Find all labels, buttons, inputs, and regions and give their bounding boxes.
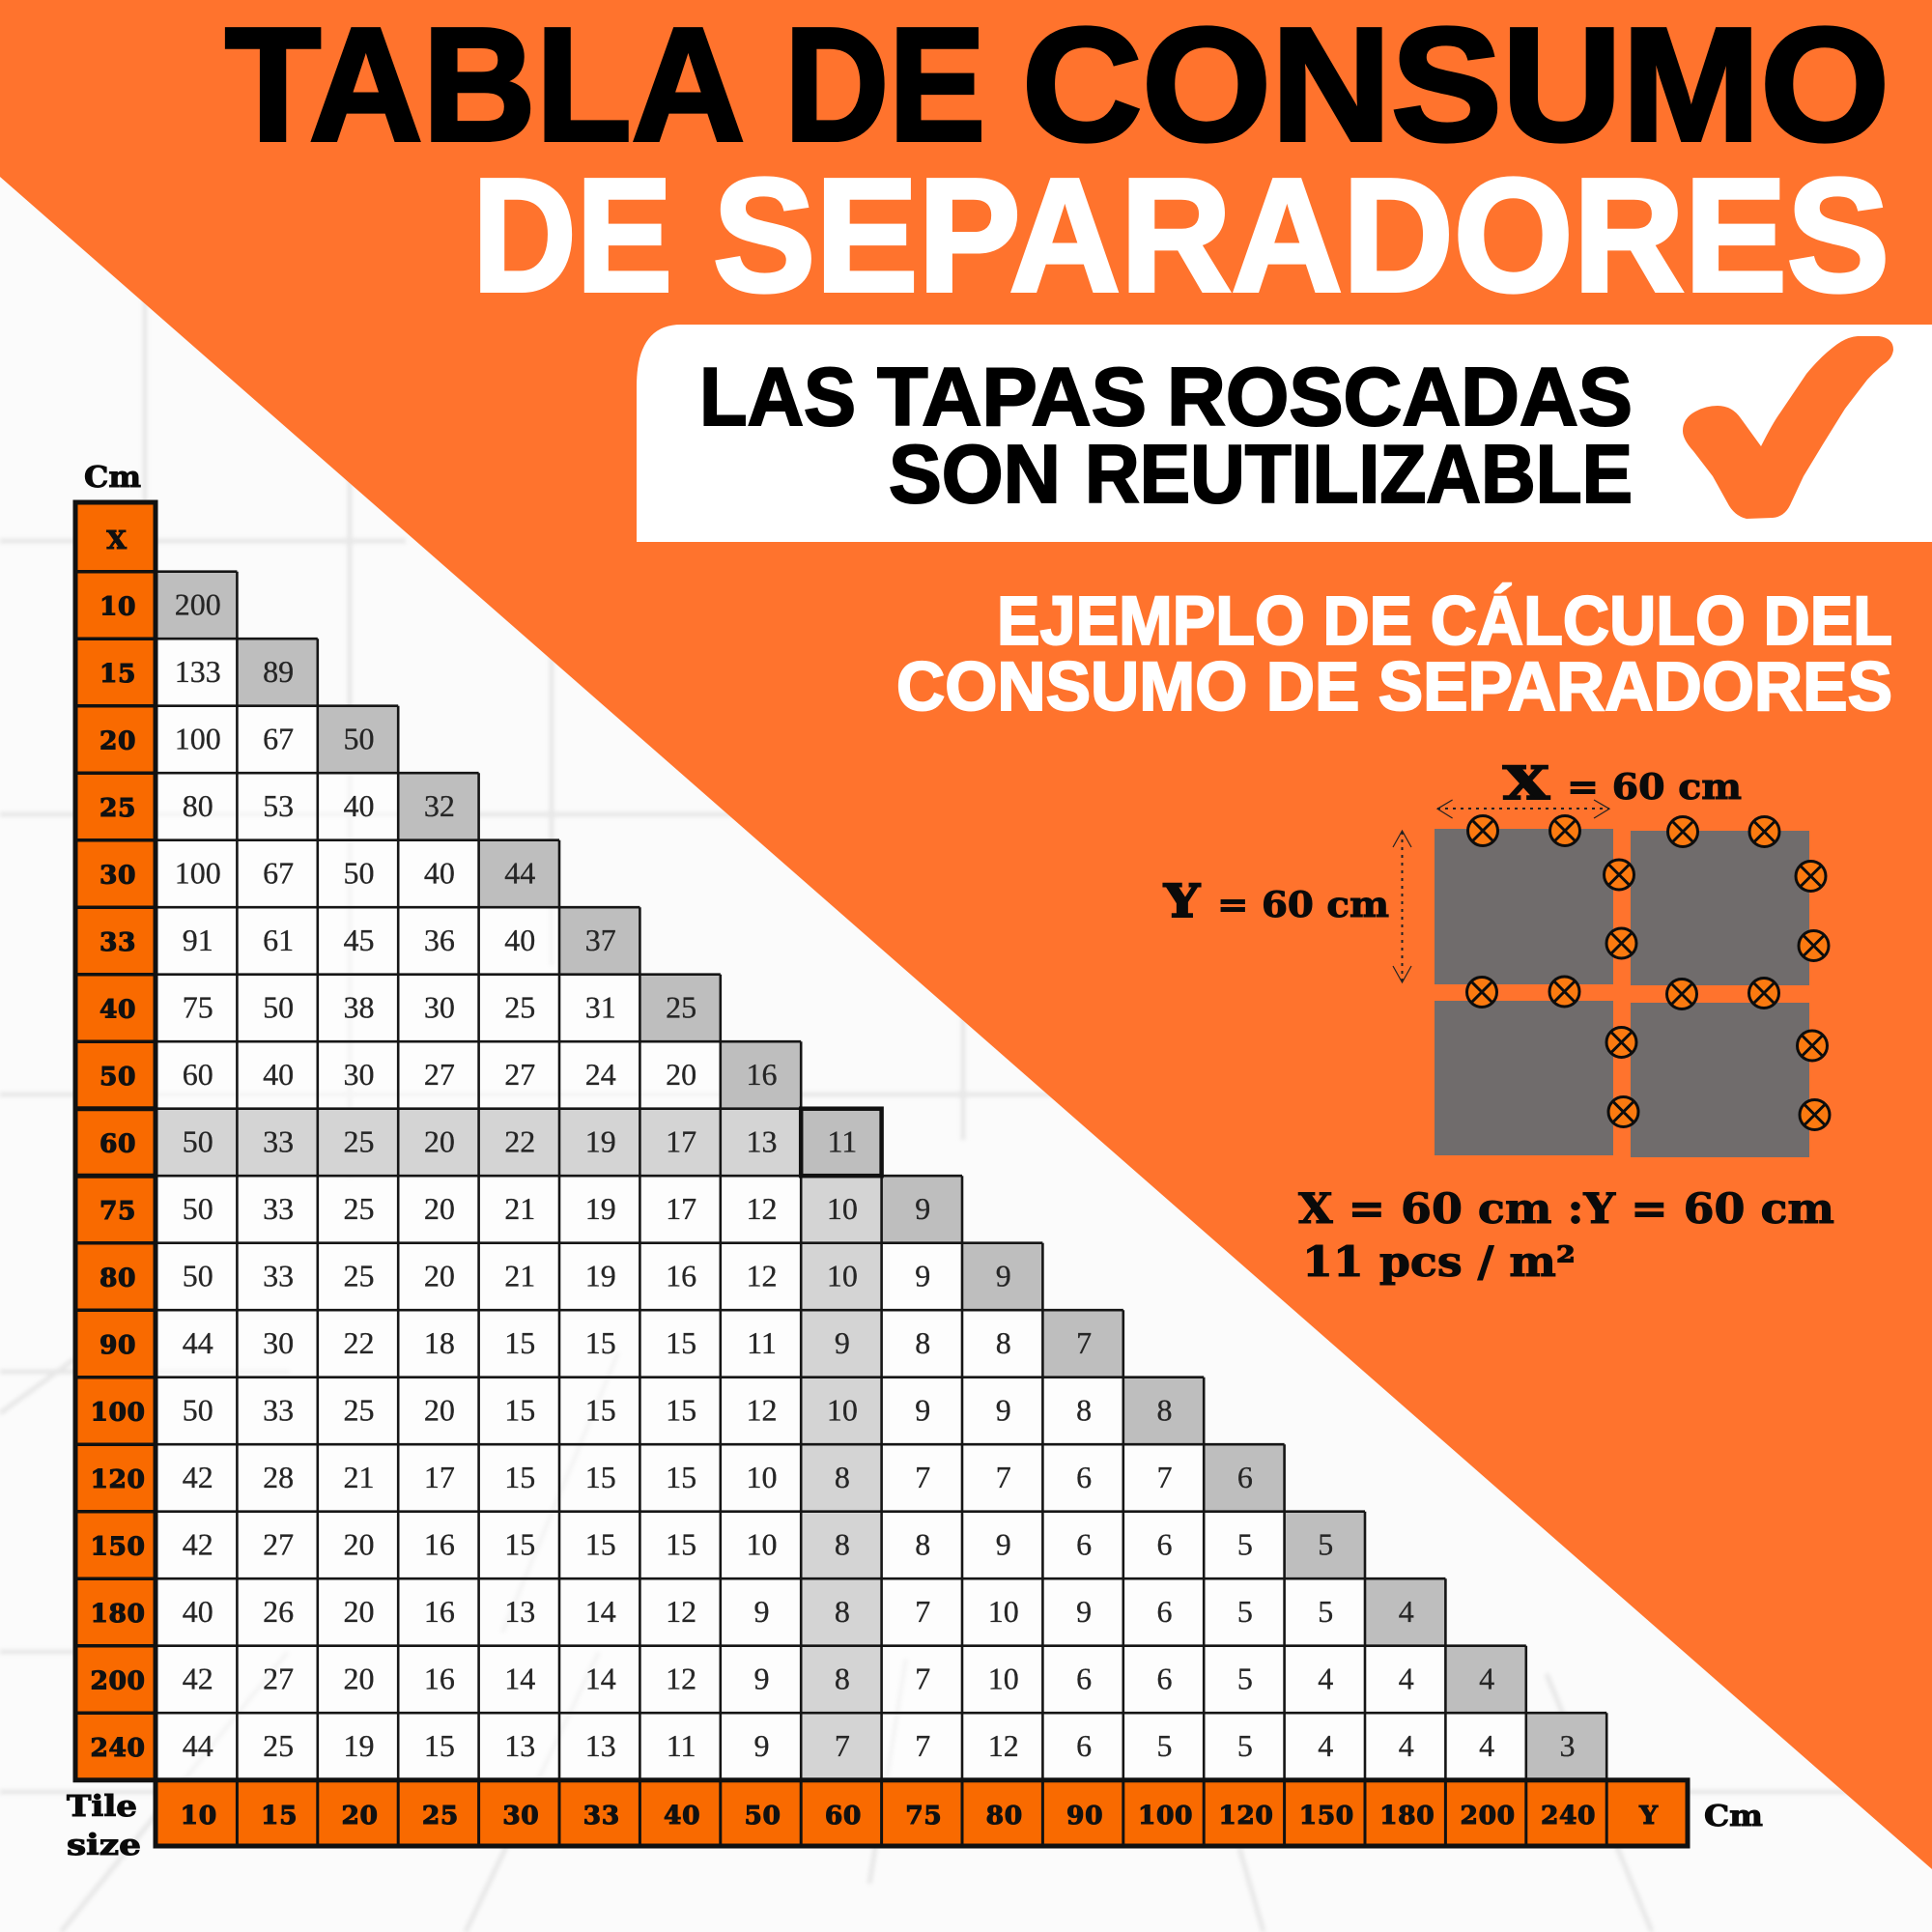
column headers: Y axis: 120 [1218, 1801, 1273, 1831]
arrow: X dimension [1437, 800, 1609, 818]
row 180 values: 8 [835, 1594, 850, 1629]
row 90 values: 44 [183, 1325, 213, 1360]
row 100 values: 9 [915, 1393, 930, 1428]
row 30 values: 100 [175, 856, 221, 891]
row 150 values: 8 [915, 1526, 930, 1561]
row 75 values: 21 [504, 1191, 535, 1226]
row 120 values: 21 [344, 1460, 375, 1494]
axis label: Cm right: Cm [1704, 1800, 1763, 1833]
row 40 values: 38 [344, 989, 375, 1024]
arrow: Y dimension [1393, 831, 1411, 982]
diagram: tile layout with spacers [1163, 757, 1830, 1157]
row 60 values: 13 [746, 1124, 777, 1159]
column headers: Y axis: 80 [986, 1801, 1023, 1831]
consumption table [67, 461, 1763, 1862]
row 120 values: 28 [263, 1460, 294, 1494]
row 240 values: 7 [835, 1728, 850, 1763]
row 150 values: 42 [183, 1526, 213, 1561]
row 20 values: 50 [344, 721, 375, 755]
title: TABLA [225, 0, 745, 175]
row headers: X axis: 240 [90, 1733, 146, 1763]
row 90 values: 15 [666, 1325, 696, 1360]
row headers: X axis: 150 [90, 1532, 146, 1561]
row 100 values: 9 [996, 1393, 1011, 1428]
row 50 values: 24 [585, 1057, 616, 1092]
row 150 values [183, 1526, 1333, 1561]
row 150 values: 8 [835, 1526, 850, 1561]
row 40 values: 31 [585, 989, 616, 1024]
row 180 values: 6 [1157, 1594, 1173, 1629]
row 240 values: 44 [183, 1728, 213, 1763]
row 75 values: 19 [585, 1191, 616, 1226]
row 240 values: 4 [1318, 1728, 1333, 1763]
row 50 values: 20 [666, 1057, 696, 1092]
row 75 values: 12 [746, 1191, 777, 1226]
row 180 values: 5 [1318, 1594, 1333, 1629]
row 80 values: 9 [996, 1258, 1011, 1293]
row 40 values [183, 989, 696, 1024]
icon: orange check mark [1683, 336, 1893, 519]
row 25 values: 80 [183, 788, 213, 823]
row 33 values [183, 923, 616, 957]
row 120 values: 10 [746, 1460, 777, 1494]
column headers: Y axis: Y [1638, 1801, 1659, 1831]
row 120 values: 6 [1237, 1460, 1253, 1494]
row 75 values: 17 [666, 1191, 696, 1226]
row 30 values: 40 [424, 856, 455, 891]
row 75 values: 25 [344, 1191, 375, 1226]
row 80 values: 20 [424, 1258, 455, 1293]
row 60 values: 11 [827, 1124, 857, 1159]
row 120 values [183, 1460, 1253, 1494]
row 200 values: 6 [1076, 1662, 1092, 1696]
banner text: SON [889, 429, 1061, 521]
row 180 values: 26 [263, 1594, 294, 1629]
row 240 values: 7 [915, 1728, 930, 1763]
row 80 values: 21 [504, 1258, 535, 1293]
row 200 values: 5 [1237, 1662, 1253, 1696]
title: SEPARADORES [713, 146, 1889, 326]
row 90 values: 15 [585, 1325, 616, 1360]
row 200 values: 20 [344, 1662, 375, 1696]
column headers: Y axis: 240 [1541, 1801, 1596, 1831]
row 33 values: 45 [344, 923, 375, 957]
cell shading [75, 502, 1688, 1846]
row headers: X axis: 50 [99, 1062, 136, 1092]
row 240 values: 13 [585, 1728, 616, 1763]
row 30 values: 67 [263, 856, 294, 891]
row 90 values: 15 [504, 1325, 535, 1360]
row 100 values: 12 [746, 1393, 777, 1428]
column headers: Y axis: 75 [905, 1801, 942, 1831]
row 90 values: 11 [747, 1325, 777, 1360]
banner text: TAPAS [877, 352, 1147, 443]
label: Y = 60 cm: Y [1163, 875, 1200, 928]
row 80 values: 33 [263, 1258, 294, 1293]
row 120 values: 17 [424, 1460, 455, 1494]
row 90 values: 8 [996, 1325, 1011, 1360]
row 60 values [183, 1124, 857, 1159]
row headers: X axis: 25 [99, 793, 136, 823]
row headers: X axis [90, 526, 146, 1763]
column headers: Y axis: 50 [744, 1801, 781, 1831]
row 50 values: 27 [504, 1057, 535, 1092]
banner text: ROSCADAS [1167, 352, 1633, 443]
heading: calculation example [896, 583, 1892, 725]
row 180 values: 9 [753, 1594, 769, 1629]
row 200 values: 4 [1479, 1662, 1494, 1696]
row 30 values: 44 [504, 856, 535, 891]
column headers: Y axis: 100 [1138, 1801, 1193, 1831]
row 180 values: 20 [344, 1594, 375, 1629]
row 60 values: 20 [424, 1124, 455, 1159]
label: X = 60 cm: = 60 cm [1567, 767, 1742, 808]
row 75 values: 9 [915, 1191, 930, 1226]
row headers: X axis: 30 [99, 860, 136, 891]
title [225, 0, 1889, 326]
row 240 values: 15 [424, 1728, 455, 1763]
row 40 values: 30 [424, 989, 455, 1024]
row 15 values: 89 [263, 654, 294, 689]
row 150 values: 5 [1318, 1526, 1333, 1561]
row 180 values: 12 [666, 1594, 696, 1629]
grid lines [75, 502, 1688, 1846]
row headers: X axis: 20 [99, 726, 136, 755]
column headers: Y axis: 30 [502, 1801, 539, 1831]
heading: calculation example: EJEMPLO DE CÁLCULO DEL [997, 583, 1892, 660]
row 75 values [183, 1191, 930, 1226]
axis label: Tile size [67, 1790, 141, 1862]
row 80 values: 25 [344, 1258, 375, 1293]
row 60 values: 19 [585, 1124, 616, 1159]
row 100 values: 15 [585, 1393, 616, 1428]
row 240 values: 13 [504, 1728, 535, 1763]
row 150 values: 20 [344, 1526, 375, 1561]
row 30 values: 50 [344, 856, 375, 891]
column headers: Y axis: 150 [1299, 1801, 1354, 1831]
row 33 values: 91 [183, 923, 213, 957]
row 180 values: 14 [585, 1594, 616, 1629]
result text [1298, 1185, 1834, 1287]
row 80 values: 50 [183, 1258, 213, 1293]
row 240 values: 5 [1237, 1728, 1253, 1763]
row 100 values: 20 [424, 1393, 455, 1428]
row 180 values: 5 [1237, 1594, 1253, 1629]
row 120 values: 15 [504, 1460, 535, 1494]
row 200 values: 12 [666, 1662, 696, 1696]
row 150 values: 15 [504, 1526, 535, 1561]
row 200 values: 6 [1157, 1662, 1173, 1696]
row headers: X axis: 120 [90, 1464, 146, 1494]
row 200 values: 42 [183, 1662, 213, 1696]
result text: 11 pcs / m² [1302, 1238, 1576, 1287]
row headers: X axis: 200 [90, 1665, 146, 1696]
column headers: Y axis: 180 [1379, 1801, 1435, 1831]
row 200 values: 14 [504, 1662, 535, 1696]
row 150 values: 5 [1237, 1526, 1253, 1561]
row 120 values: 8 [835, 1460, 850, 1494]
row 180 values: 9 [1076, 1594, 1092, 1629]
row 100 values: 15 [666, 1393, 696, 1428]
row 150 values: 10 [746, 1526, 777, 1561]
row 80 values: 10 [827, 1258, 858, 1293]
row 240 values: 25 [263, 1728, 294, 1763]
row 240 values: 12 [988, 1728, 1019, 1763]
row headers: X axis: 10 [99, 591, 136, 622]
result text: X = 60 cm :Y = 60 cm [1298, 1185, 1834, 1234]
row 15 values [175, 654, 294, 689]
row 150 values: 15 [585, 1526, 616, 1561]
row 100 values: 10 [827, 1393, 858, 1428]
row 200 values [183, 1662, 1494, 1696]
row headers: X axis: 75 [99, 1196, 136, 1226]
row 120 values: 6 [1076, 1460, 1092, 1494]
row 240 values [183, 1728, 1576, 1763]
row 180 values: 16 [424, 1594, 455, 1629]
row 240 values: 9 [753, 1728, 769, 1763]
row headers: X axis: 180 [90, 1599, 146, 1629]
row 60 values: 25 [344, 1124, 375, 1159]
column headers: Y axis: 20 [341, 1801, 379, 1831]
row 100 values: 50 [183, 1393, 213, 1428]
row 90 values: 22 [344, 1325, 375, 1360]
row 90 values: 30 [263, 1325, 294, 1360]
row headers: X axis: 33 [99, 927, 136, 957]
row 200 values: 4 [1399, 1662, 1414, 1696]
row 40 values: 25 [666, 989, 696, 1024]
row 75 values: 10 [827, 1191, 858, 1226]
row 200 values: 16 [424, 1662, 455, 1696]
row 60 values: 33 [263, 1124, 294, 1159]
row 200 values: 9 [753, 1662, 769, 1696]
row 80 values: 16 [666, 1258, 696, 1293]
row 33 values: 61 [263, 923, 294, 957]
row 150 values: 6 [1076, 1526, 1092, 1561]
row 200 values: 14 [585, 1662, 616, 1696]
banner text [699, 352, 1633, 521]
row 25 values [183, 788, 455, 823]
row 60 values: 50 [183, 1124, 213, 1159]
row 180 values: 4 [1399, 1594, 1414, 1629]
row 100 values: 8 [1157, 1393, 1173, 1428]
row 50 values: 30 [344, 1057, 375, 1092]
row 33 values: 37 [585, 923, 616, 957]
row 15 values: 133 [175, 654, 221, 689]
row 25 values: 53 [263, 788, 294, 823]
row 240 values: 4 [1479, 1728, 1494, 1763]
row 240 values: 4 [1399, 1728, 1414, 1763]
row 180 values: 10 [988, 1594, 1019, 1629]
heading: calculation example: CONSUMO DE SEPARADORES [896, 649, 1892, 725]
title: CONSUMO [1022, 0, 1889, 175]
row 240 values: 11 [667, 1728, 696, 1763]
row 240 values: 3 [1559, 1728, 1575, 1763]
row 80 values: 9 [915, 1258, 930, 1293]
row 20 values: 67 [263, 721, 294, 755]
row 150 values: 15 [666, 1526, 696, 1561]
row 50 values: 16 [746, 1057, 777, 1092]
row 80 values [183, 1258, 1011, 1293]
row 200 values: 10 [988, 1662, 1019, 1696]
label: X = 60 cm: X [1503, 757, 1550, 810]
row 100 values [183, 1393, 1173, 1428]
row 50 values [183, 1057, 777, 1092]
row 80 values: 19 [585, 1258, 616, 1293]
row 90 values [183, 1325, 1092, 1360]
column headers: Y axis [181, 1801, 1659, 1831]
spacers [1466, 815, 1830, 1130]
axis label: Tile size: size [67, 1829, 141, 1862]
row 180 values [183, 1594, 1414, 1629]
row 33 values: 40 [504, 923, 535, 957]
row 40 values: 50 [263, 989, 294, 1024]
row 40 values: 25 [504, 989, 535, 1024]
banner: reusable screw caps [637, 325, 1932, 542]
row 75 values: 50 [183, 1191, 213, 1226]
row 10 values: 200 [175, 587, 221, 622]
row 60 values: 17 [666, 1124, 696, 1159]
row 200 values: 7 [915, 1662, 930, 1696]
label: X = 60 cm [1503, 757, 1742, 810]
row 180 values: 13 [504, 1594, 535, 1629]
column headers: Y axis: 40 [664, 1801, 700, 1831]
row 120 values: 15 [666, 1460, 696, 1494]
row headers: X axis: 15 [99, 659, 136, 689]
row 120 values: 7 [1157, 1460, 1173, 1494]
row 25 values: 32 [424, 788, 455, 823]
column headers: Y axis: 200 [1461, 1801, 1516, 1831]
row 75 values: 33 [263, 1191, 294, 1226]
row 75 values: 20 [424, 1191, 455, 1226]
title: DE [472, 146, 672, 326]
label: Y = 60 cm [1163, 875, 1389, 928]
row 150 values: 16 [424, 1526, 455, 1561]
row 50 values: 40 [263, 1057, 294, 1092]
row 20 values: 100 [175, 721, 221, 755]
row 33 values: 36 [424, 923, 455, 957]
row 150 values: 6 [1157, 1526, 1173, 1561]
banner text: REUTILIZABLE [1085, 429, 1633, 521]
row 40 values: 75 [183, 989, 213, 1024]
row 120 values: 15 [585, 1460, 616, 1494]
row 100 values: 8 [1076, 1393, 1092, 1428]
column headers: Y axis: 90 [1066, 1801, 1103, 1831]
column headers: Y axis: 10 [181, 1801, 217, 1831]
tiles [1435, 829, 1809, 1157]
row headers: X axis: 60 [99, 1128, 136, 1159]
row 100 values: 25 [344, 1393, 375, 1428]
row 90 values: 7 [1076, 1325, 1092, 1360]
row 80 values: 12 [746, 1258, 777, 1293]
row 120 values: 7 [915, 1460, 930, 1494]
row headers: X axis: 90 [99, 1330, 136, 1360]
row 240 values: 19 [344, 1728, 375, 1763]
row 200 values: 8 [835, 1662, 850, 1696]
row 25 values: 40 [344, 788, 375, 823]
row headers: X axis: 100 [90, 1397, 146, 1428]
axis label: Cm top: Cm [84, 461, 141, 495]
row headers: X axis: X [106, 526, 128, 555]
axis label: Tile size: Tile [67, 1790, 137, 1824]
row 20 values [175, 721, 375, 755]
row 90 values: 9 [835, 1325, 850, 1360]
label: Y = 60 cm: = 60 cm [1217, 885, 1389, 925]
row headers: X axis: 40 [99, 995, 136, 1024]
column headers: Y axis: 60 [825, 1801, 862, 1831]
column headers: Y axis: 33 [583, 1801, 620, 1831]
row 60 values: 22 [504, 1124, 535, 1159]
row 240 values: 5 [1157, 1728, 1173, 1763]
column headers: Y axis: 15 [261, 1801, 298, 1831]
row 100 values: 33 [263, 1393, 294, 1428]
row 50 values: 60 [183, 1057, 213, 1092]
row 240 values: 6 [1076, 1728, 1092, 1763]
row 50 values: 27 [424, 1057, 455, 1092]
row headers: X axis: 80 [99, 1264, 136, 1293]
row 200 values: 27 [263, 1662, 294, 1696]
row 120 values: 42 [183, 1460, 213, 1494]
row 90 values: 18 [424, 1325, 455, 1360]
row 180 values: 40 [183, 1594, 213, 1629]
row 180 values: 7 [915, 1594, 930, 1629]
row 100 values: 15 [504, 1393, 535, 1428]
banner text: LAS [699, 352, 856, 443]
title: DE [784, 0, 985, 175]
row 150 values: 9 [996, 1526, 1011, 1561]
row 90 values: 8 [915, 1325, 930, 1360]
row 30 values [175, 856, 535, 891]
row 200 values: 4 [1318, 1662, 1333, 1696]
column headers: Y axis: 25 [422, 1801, 459, 1831]
row 120 values: 7 [996, 1460, 1011, 1494]
row 150 values: 27 [263, 1526, 294, 1561]
